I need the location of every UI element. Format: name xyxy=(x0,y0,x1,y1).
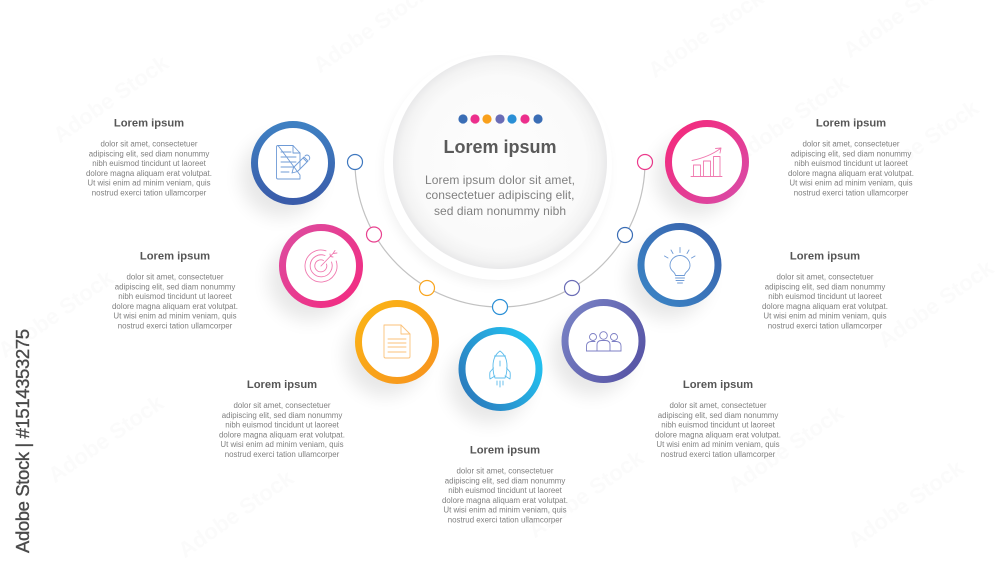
stock watermark pattern: Adobe Stock xyxy=(723,400,849,498)
text block 1: nostrud exerci tation ullamcorper xyxy=(92,188,207,198)
text block 6: Ut wisi enim ad minim veniam, quis xyxy=(763,312,887,321)
text block 5: adipiscing elit, sed diam nonummy xyxy=(658,411,778,420)
text block 7: Lorem ipsum xyxy=(816,118,886,130)
text block 7: nostrud exerci tation ullamcorper xyxy=(794,188,909,198)
text block 6: dolore magna aliquam erat volutpat. xyxy=(762,302,888,311)
central heading: Lorem ipsum xyxy=(443,137,557,157)
text block 4: dolore magna aliquam erat volutpat. xyxy=(442,496,568,505)
text block 3: Ut wisi enim ad minim veniam, quis xyxy=(220,440,344,449)
text block 6: Lorem ipsum xyxy=(790,250,860,262)
text block 3: Lorem ipsum xyxy=(247,379,317,391)
item 4: rocket xyxy=(449,330,539,423)
icon: document with pencil xyxy=(276,146,310,179)
item 1: document and pencil xyxy=(241,124,332,217)
text block 4 xyxy=(442,444,568,524)
text block 4: adipiscing elit, sed diam nonummy xyxy=(445,476,565,485)
item 3: orange document xyxy=(345,304,436,396)
text block 1: dolore magna aliquam erat volutpat. xyxy=(86,169,212,178)
item 6: light bulb xyxy=(628,226,718,319)
text block 1: dolor sit amet, consectetuer xyxy=(101,140,198,148)
text block 2: Lorem ipsum xyxy=(140,250,210,262)
text block 1: nibh euismod tincidunt ut laoreet xyxy=(92,159,207,168)
text block 2: nostrud exerci tation ullamcorper xyxy=(118,322,233,330)
text block 3: dolor sit amet, consectetuer xyxy=(234,401,331,410)
icon: rocket xyxy=(490,351,510,387)
stock watermark pattern: Adobe Stock xyxy=(858,95,984,193)
central text: Lorem ipsum dolor sit amet, xyxy=(425,173,575,187)
text block 4: Lorem ipsum xyxy=(470,444,540,456)
stock watermark pattern: Adobe Stock xyxy=(843,455,969,553)
text block 2: dolor sit amet, consectetuer xyxy=(127,272,224,282)
icon: target xyxy=(305,250,337,282)
text block 5 xyxy=(655,379,781,459)
stock watermark pattern: Adobe Stock xyxy=(173,465,299,563)
stock watermark pattern: Adobe Stock xyxy=(873,255,999,353)
text block 2: dolore magna aliquam erat volutpat. xyxy=(112,302,238,311)
stock watermark pattern: Adobe Stock xyxy=(43,390,169,488)
text block 2: Ut wisi enim ad minim veniam, quis xyxy=(113,312,237,321)
connecting arc xyxy=(355,162,645,307)
icon: page xyxy=(384,325,410,358)
text block 7: Ut wisi enim ad minim veniam, quis xyxy=(789,179,913,188)
item 7: growth chart xyxy=(655,124,746,216)
text block 3: adipiscing elit, sed diam nonummy xyxy=(222,411,342,420)
text block 2 xyxy=(112,250,238,330)
text block 1 xyxy=(86,118,212,198)
text block 3: nostrud exerci tation ullamcorper xyxy=(225,450,340,459)
stock watermark pattern: Adobe Stock xyxy=(728,70,854,168)
text block 1: adipiscing elit, sed diam nonummy xyxy=(89,149,209,158)
timeline nodes xyxy=(348,154,652,314)
text block 6: nostrud exerci tation ullamcorper xyxy=(768,322,883,330)
text block 1: Lorem ipsum xyxy=(114,118,184,130)
text block 5: Lorem ipsum xyxy=(683,379,753,391)
stock id label: Adobe Stock | #1514353275 xyxy=(12,329,33,553)
text block 5: dolore magna aliquam erat volutpat. xyxy=(655,430,781,439)
text block 2: nibh euismod tincidunt ut laoreet xyxy=(118,292,233,301)
central text xyxy=(425,173,575,218)
text block 7: adipiscing elit, sed diam nonummy xyxy=(791,149,911,158)
icon: bulb xyxy=(664,248,695,283)
text block 4: nibh euismod tincidunt ut laoreet xyxy=(448,486,563,495)
text block 7: nibh euismod tincidunt ut laoreet xyxy=(794,159,909,168)
text block 4: nostrud exerci tation ullamcorper xyxy=(448,516,563,524)
colour dots xyxy=(458,114,543,124)
text block 2: adipiscing elit, sed diam nonummy xyxy=(115,282,235,291)
text block 7: dolor sit amet, consectetuer xyxy=(803,140,900,148)
text block 3: dolore magna aliquam erat volutpat. xyxy=(219,430,345,439)
text block 3 xyxy=(219,379,345,459)
text block 5: dolor sit amet, consectetuer xyxy=(670,401,767,410)
icon: team xyxy=(586,332,621,351)
central circle xyxy=(384,52,612,284)
text block 5: Ut wisi enim ad minim veniam, quis xyxy=(656,440,780,449)
text block 5: nibh euismod tincidunt ut laoreet xyxy=(661,421,776,430)
text block 6 xyxy=(762,250,888,330)
icon: bar chart xyxy=(691,148,722,176)
text block 4: dolor sit amet, consectetuer xyxy=(457,466,554,476)
item 5: people xyxy=(552,302,642,395)
central text: sed diam nonummy nibh xyxy=(434,204,566,218)
stock watermark pattern: Adobe Stock xyxy=(48,50,174,148)
text block 7 xyxy=(788,118,914,198)
central text: consectetuer adipiscing elit, xyxy=(426,188,574,202)
text block 7: dolore magna aliquam erat volutpat. xyxy=(788,169,914,178)
text block 6: nibh euismod tincidunt ut laoreet xyxy=(768,292,883,301)
text block 4: Ut wisi enim ad minim veniam, quis xyxy=(443,506,567,515)
text block 6: dolor sit amet, consectetuer xyxy=(777,272,874,282)
text block 5: nostrud exerci tation ullamcorper xyxy=(661,450,776,459)
text block 6: adipiscing elit, sed diam nonummy xyxy=(765,282,885,291)
item 2: target xyxy=(269,228,360,320)
text block 3: nibh euismod tincidunt ut laoreet xyxy=(225,421,340,430)
text block 1: Ut wisi enim ad minim veniam, quis xyxy=(87,179,211,188)
stock watermark pattern: Adobe Stock xyxy=(523,445,649,543)
